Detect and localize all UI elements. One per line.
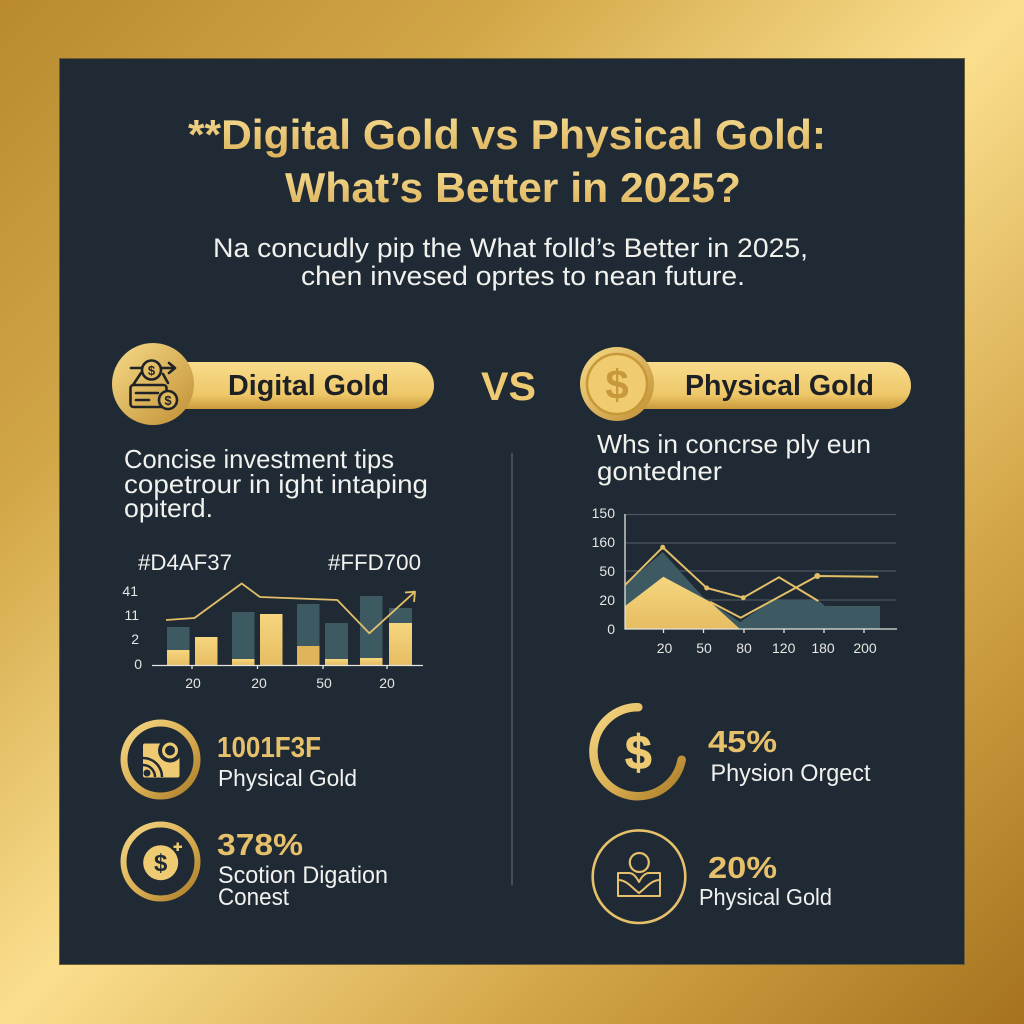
title: **Digital Gold vs Physical Gold: — [188, 111, 826, 158]
label — [218, 862, 388, 911]
value: 378% — [217, 827, 303, 862]
text block: physical gold description: gontedner — [597, 456, 722, 486]
icon: digital gold coin and card: $ — [164, 393, 172, 408]
y axis labels: 2 — [131, 631, 139, 647]
icon: dollar coin — [580, 347, 654, 421]
header: Physical Gold pill — [580, 347, 911, 421]
y axis labels: 41 — [122, 583, 138, 599]
x axis labels — [185, 675, 395, 691]
y axis labels: 150 — [592, 505, 615, 521]
label: Scotion Digation — [218, 862, 388, 889]
text block: digital gold description: opiterd. — [124, 493, 213, 523]
value: 1001F3F — [217, 732, 321, 764]
x axis labels: 20 — [379, 675, 395, 691]
y axis labels: 160 — [592, 534, 615, 550]
VS label: VS — [481, 365, 536, 409]
text block: digital gold description: copetrour in ight intaping — [124, 469, 428, 499]
y axis labels: 20 — [599, 592, 615, 608]
text block: digital gold description: Concise investment tips — [124, 444, 394, 474]
icon: dollar sparkle ring: $ — [154, 850, 168, 877]
y axis labels: 50 — [599, 563, 615, 579]
label: Physion Orgect — [710, 760, 871, 787]
area chart: physical gold — [592, 505, 897, 656]
title: What’s Better in 2025? — [285, 164, 741, 211]
x axis labels: 200 — [853, 640, 877, 656]
icon: dollar sparkle ring — [124, 824, 198, 898]
teal area — [625, 552, 880, 629]
gold area — [625, 577, 740, 629]
x axis labels: 120 — [772, 640, 796, 656]
header: Digital Gold pill — [112, 343, 434, 425]
icon: digital gold coin and card: $ — [148, 363, 156, 378]
x axis labels: 50 — [696, 640, 712, 656]
stat: 45% — [593, 707, 871, 796]
panel: dark main card — [60, 58, 964, 964]
x axis labels: 20 — [657, 640, 672, 656]
bar chart: digital gold — [122, 550, 423, 691]
title — [188, 111, 826, 211]
text block: physical gold description — [597, 429, 871, 486]
y axis labels: 0 — [134, 656, 142, 672]
x axis labels: 20 — [185, 675, 201, 691]
stat: 378% — [124, 824, 388, 911]
label: Digital Gold: Digital Gold — [228, 370, 389, 402]
x axis labels — [657, 640, 877, 656]
label: Physical Gold: Physical Gold — [685, 370, 874, 402]
icon: digital gold coin and card — [112, 343, 194, 425]
legend labels: #D4AF37 — [138, 550, 232, 575]
icon: dollar arc gauge — [593, 707, 682, 796]
gold line one — [625, 547, 818, 601]
icon: dollar coin: $ — [605, 361, 629, 408]
text block: physical gold description: Whs in concrse ply eun — [597, 429, 871, 459]
label: Physical Gold — [218, 765, 357, 791]
legend labels: #FFD700 — [328, 550, 421, 575]
text block: digital gold description — [124, 444, 428, 523]
grid lines — [625, 514, 896, 600]
gold bars — [167, 614, 412, 665]
stat: 1001F3F — [124, 723, 357, 796]
centre divider — [511, 453, 513, 885]
label: Physical Gold — [699, 884, 832, 910]
icon: person with open book — [593, 830, 685, 923]
x axis labels: 50 — [316, 675, 332, 691]
icon: dollar arc gauge: $ — [625, 727, 652, 780]
axis — [152, 665, 423, 669]
subtitle — [213, 233, 808, 291]
y axis labels: 0 — [607, 621, 615, 637]
value: 20% — [708, 850, 777, 885]
legend labels — [138, 550, 421, 575]
x axis labels: 80 — [736, 640, 752, 656]
y axis labels: 11 — [124, 607, 139, 623]
y axis labels — [122, 583, 142, 672]
subtitle: chen invesed oprtes to nean future. — [301, 261, 745, 291]
gold line two — [710, 576, 878, 618]
label: Conest — [218, 884, 289, 911]
teal bars — [167, 596, 412, 665]
subtitle: Na concudly pip the What folld’s Better in 2025, — [213, 233, 808, 263]
stat: 20% — [593, 830, 832, 923]
x axis labels: 180 — [811, 640, 835, 656]
trend line with arrow — [166, 584, 415, 633]
icon: signal square ring — [124, 723, 197, 796]
value: 45% — [708, 724, 777, 759]
axes — [625, 514, 897, 633]
x axis labels: 20 — [251, 675, 267, 691]
data markers — [660, 545, 820, 600]
y axis labels — [592, 505, 615, 637]
